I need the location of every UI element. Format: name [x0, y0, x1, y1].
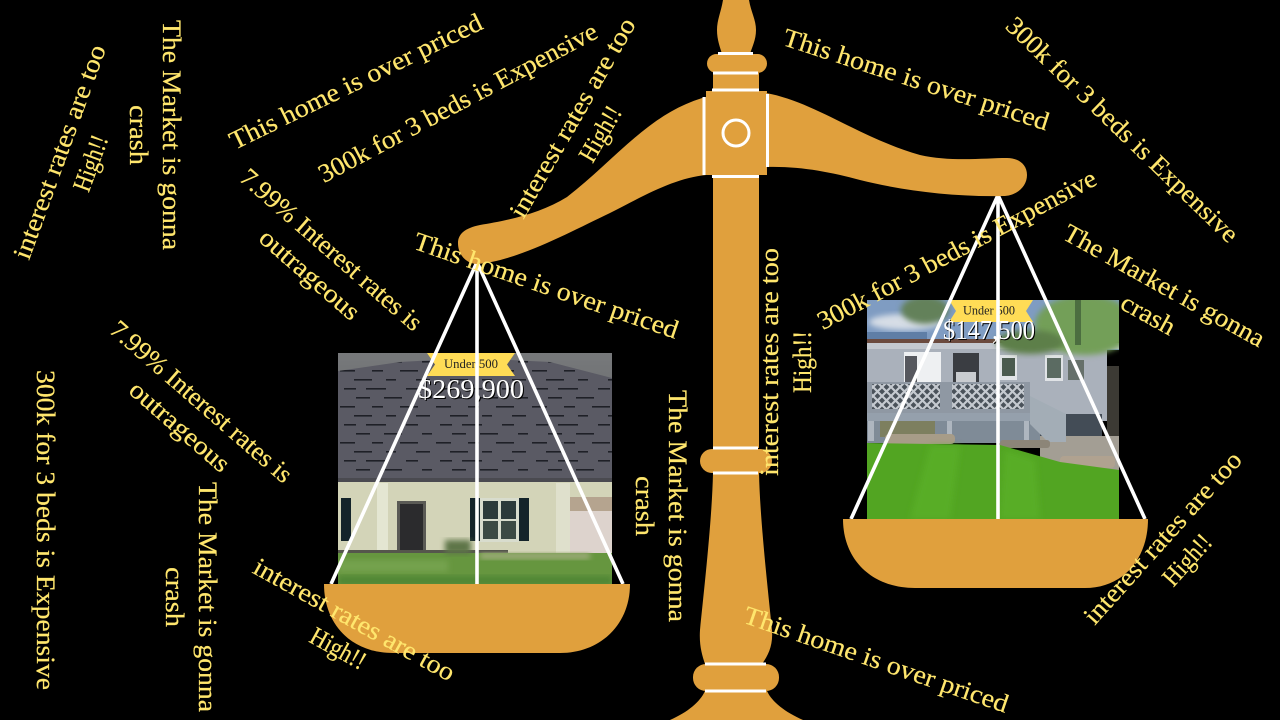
text: market crash 1: The Market is gonna: [1058, 218, 1271, 353]
text: interest rate outrageous 1: 7.99% Interest rates is: [234, 163, 428, 337]
price tag: right house: $147,500: [943, 315, 1035, 345]
right pan strings: [851, 195, 1145, 519]
text: interest rate outrageous 1: outrageous: [253, 223, 366, 326]
price tag: right house: Under 500: [963, 302, 1015, 318]
pivot block: [706, 91, 767, 175]
top collar: [707, 54, 767, 73]
text: interest rates 5: interest rates are too: [1078, 445, 1248, 630]
text: interest rates 3: interest rates are too: [7, 41, 112, 263]
text: market crash 1: crash: [1116, 288, 1181, 341]
price tag: left house: $269,900: [418, 374, 524, 404]
text: interest rate outrageous 2: outrageous: [123, 375, 236, 478]
text: interest rates 4: interest rates are too: [248, 552, 460, 687]
text: interest rates 5: High!!: [1156, 528, 1218, 592]
text: interest rate outrageous 2: 7.99% Interest rates is: [104, 315, 298, 489]
left pan strings: [331, 262, 623, 584]
text: this home is over priced 1: This home is over priced: [224, 8, 487, 156]
text: market crash 2: The Market is gonna: [663, 390, 692, 622]
column: [700, 73, 772, 664]
text: market crash 4: The Market is gonna: [193, 482, 222, 712]
text: interest rates 2: interest rates are too: [755, 248, 784, 476]
text: interest rates 2: [755, 248, 817, 476]
right pan: [843, 519, 1148, 588]
text: market crash 2: crash: [630, 476, 659, 536]
scale: [324, 0, 1148, 720]
text: 300k expensive 3: 300k for 3 beds is Expensive: [812, 164, 1101, 336]
text: interest rates 1: [504, 13, 669, 239]
text: interest rates 4: High!!: [305, 621, 372, 676]
text: this home is over priced 2: This home is over priced: [779, 23, 1053, 136]
finial: [717, 0, 756, 54]
text: interest rates 3: High!!: [67, 131, 114, 195]
price tag: right house: [943, 300, 1035, 345]
price tag: left house: [418, 353, 524, 404]
text: 300k expensive 1: 300k for 3 beds is Expensive: [313, 17, 602, 189]
text: interest rates 3: [7, 41, 143, 274]
text: market crash 3: The Market is gonna: [157, 20, 186, 250]
text: market crash 3: crash: [124, 105, 153, 165]
foot collar: [693, 664, 779, 691]
text: this home is over priced 4: This home is over priced: [740, 601, 1012, 718]
lower collar: [700, 449, 772, 473]
text: market crash 4: crash: [160, 567, 189, 627]
text: market crash 3: [124, 20, 186, 250]
text: market crash 4: [160, 482, 222, 712]
left pan: [324, 584, 630, 653]
text: interest rates 2: High!!: [788, 331, 817, 393]
text: 300k expensive 4: 300k for 3 beds is Expensive: [31, 370, 60, 690]
text: 300k expensive 2: 300k for 3 beds is Expensive: [1000, 11, 1245, 248]
text: interest rates 4: [232, 552, 460, 716]
base: [670, 691, 803, 720]
price tag: left house: Under 500: [444, 356, 498, 371]
text: this home is over priced 3: This home is over priced: [410, 227, 682, 344]
photo: house on right pan: [867, 295, 1135, 519]
beam: [458, 93, 1027, 264]
text: interest rates 1: High!!: [573, 101, 628, 167]
scale white details: [704, 54, 768, 691]
text: market crash 2: [630, 390, 692, 622]
text: interest rates 1: interest rates are too: [504, 13, 642, 223]
photo: house on left pan: [338, 353, 612, 585]
